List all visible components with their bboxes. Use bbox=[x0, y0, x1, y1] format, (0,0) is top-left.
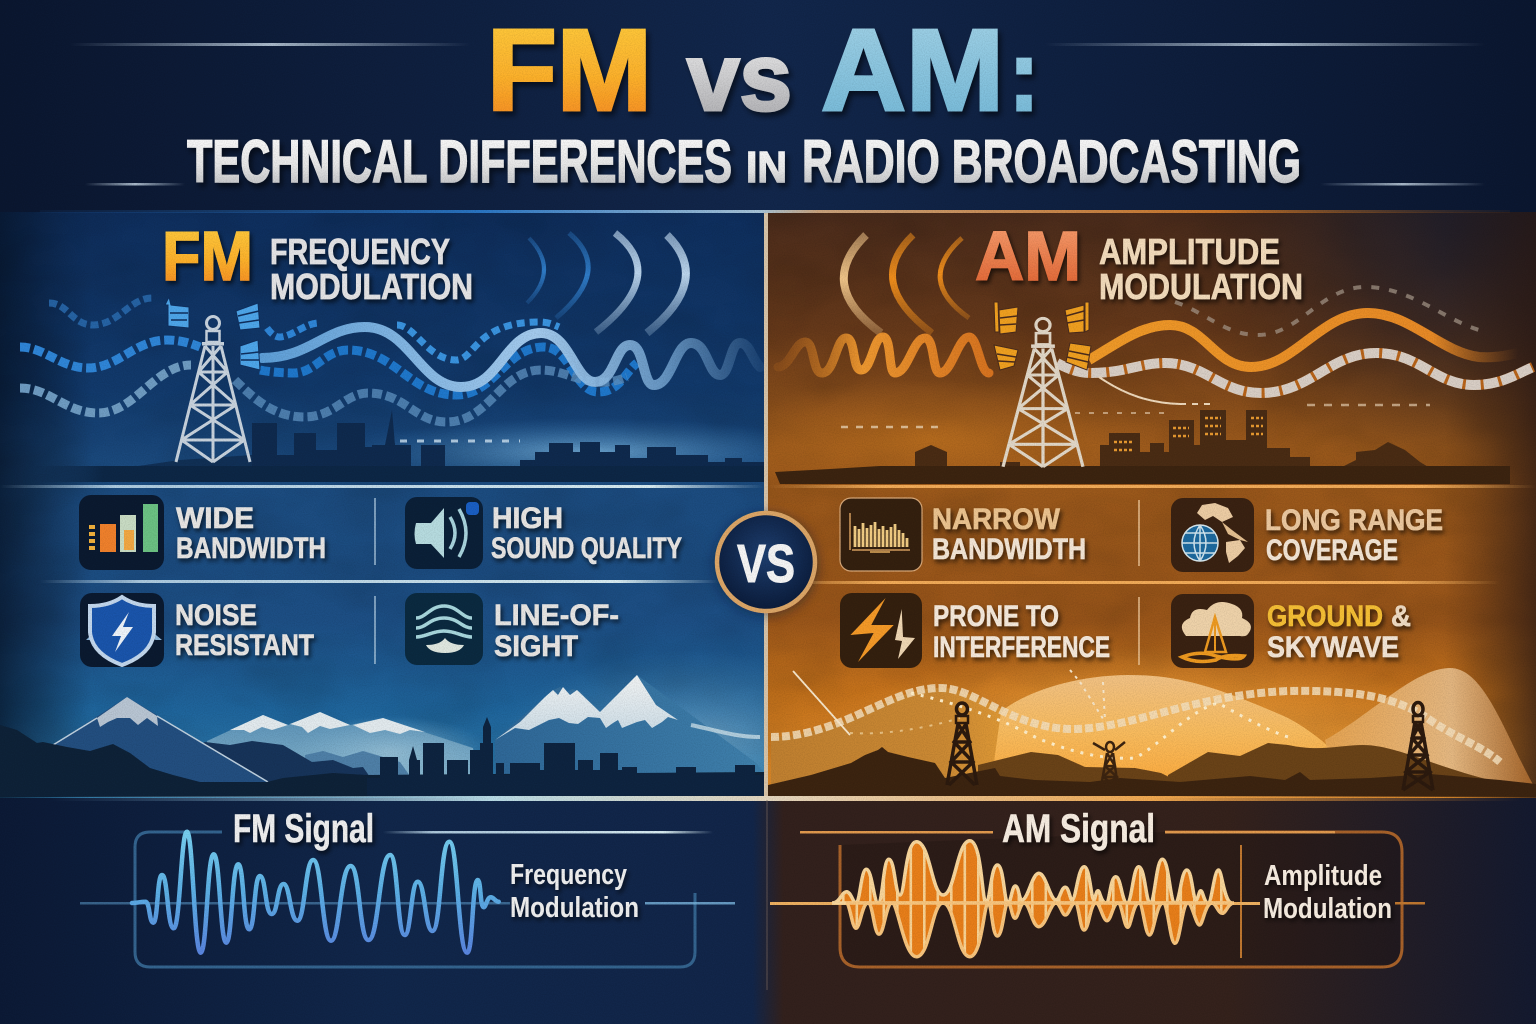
label: HIGH bbox=[492, 502, 563, 535]
mid dark hill bbox=[204, 741, 368, 782]
title bbox=[487, 5, 1039, 135]
label: SIGHT bbox=[494, 630, 578, 663]
AM signal caption bbox=[1263, 860, 1392, 925]
title: FM bbox=[487, 5, 652, 135]
label bbox=[1265, 504, 1443, 567]
pale mid mountains bbox=[207, 712, 474, 775]
label: NARROW bbox=[932, 503, 1061, 536]
AM radio arcs bbox=[844, 235, 969, 333]
label: WIDE bbox=[176, 502, 254, 535]
FM heading: MODULATION bbox=[270, 266, 473, 307]
AM thin curve and dotted lines bbox=[841, 377, 1430, 427]
label: SOUND QUALITY bbox=[491, 532, 682, 565]
panel: AM bbox=[768, 212, 1536, 798]
AM heading: MODULATION bbox=[1099, 266, 1303, 307]
label bbox=[175, 599, 314, 662]
feature: high sound quality bbox=[405, 497, 682, 569]
FM heading bbox=[162, 217, 473, 307]
dark foreground silhouette bbox=[768, 747, 1536, 797]
panel: FM bbox=[0, 212, 764, 798]
FM radio arcs bbox=[527, 233, 686, 333]
VS badge: VS bbox=[737, 534, 795, 594]
AM thin gray dashed wave bbox=[1175, 287, 1479, 335]
label: SKYWAVE bbox=[1267, 631, 1399, 664]
FM waveform bbox=[132, 832, 499, 953]
subtitle: IN bbox=[746, 143, 787, 192]
FM heading: FM bbox=[162, 217, 253, 295]
dotted sky path bbox=[911, 693, 1288, 758]
center divider bbox=[764, 212, 768, 798]
AM antenna panels bbox=[994, 302, 1091, 370]
feature: narrow bandwidth bbox=[840, 498, 1086, 571]
icon: globe bbox=[1171, 498, 1254, 572]
title: AM bbox=[821, 5, 1004, 135]
AM waveform bbox=[832, 841, 1234, 957]
feature: wide bandwidth bbox=[79, 495, 326, 570]
FM signal caption: Modulation bbox=[510, 892, 639, 924]
tower small bbox=[1093, 742, 1125, 787]
signal frame bbox=[135, 832, 695, 967]
label: COVERAGE bbox=[1266, 534, 1398, 567]
feature: ground and skywave bbox=[1171, 594, 1411, 668]
FM solid modulated wave bbox=[262, 327, 760, 387]
subtitle: RADIO BROADCASTING bbox=[802, 128, 1301, 195]
icon: lightning bbox=[840, 593, 922, 668]
label bbox=[932, 503, 1086, 566]
label bbox=[176, 502, 326, 565]
AM heading: AM bbox=[975, 217, 1081, 295]
AM signal caption: Amplitude bbox=[1264, 860, 1382, 892]
label bbox=[491, 502, 682, 565]
label: LONG RANGE bbox=[1265, 504, 1443, 537]
top panel edge line bbox=[40, 210, 1510, 213]
panel: FM signal bbox=[80, 807, 735, 967]
label: PRONE TO bbox=[933, 600, 1059, 633]
label: INTERFERENCE bbox=[933, 631, 1110, 664]
label: NOISE bbox=[175, 599, 257, 632]
VS badge bbox=[715, 513, 817, 615]
icon: cloud and mast bbox=[1171, 594, 1254, 668]
axis line bbox=[80, 902, 735, 904]
FM signal caption: Frequency bbox=[510, 859, 627, 891]
tower left bbox=[947, 703, 977, 785]
FM skyline bbox=[30, 410, 764, 482]
title: vs bbox=[687, 24, 792, 131]
icon: narrow spectrum bbox=[840, 498, 922, 571]
tower right bbox=[1403, 702, 1433, 790]
title: : bbox=[1009, 20, 1039, 132]
dark foreground hills bbox=[0, 725, 764, 797]
AM solid modulated wave bbox=[1089, 313, 1518, 367]
gold hill under wave bbox=[771, 688, 1000, 784]
axis line bbox=[770, 902, 1425, 905]
AM heading: AMPLITUDE bbox=[1099, 231, 1280, 272]
signal frame bbox=[840, 832, 1402, 967]
right mountains bbox=[495, 675, 760, 774]
light hills bbox=[994, 668, 1532, 784]
FM antenna panels bbox=[165, 297, 260, 370]
FM heading: FREQUENCY bbox=[270, 231, 450, 272]
AM skyline bbox=[775, 410, 1510, 484]
AM feature divider lines bbox=[768, 485, 1536, 665]
FM landscape with mountains and city bbox=[0, 675, 764, 797]
icon: waves bbox=[405, 593, 483, 665]
AM squiggle input wave bbox=[778, 337, 989, 373]
AM signal heading: AM Signal bbox=[1002, 807, 1155, 851]
panel: AM signal bbox=[770, 807, 1425, 967]
FM feature divider lines bbox=[0, 485, 764, 664]
feature: line-of-sight bbox=[405, 593, 619, 665]
label bbox=[494, 599, 619, 663]
label: BANDWIDTH bbox=[932, 533, 1086, 566]
FM signal heading: FM Signal bbox=[233, 807, 374, 851]
dashed signal wave bbox=[771, 688, 1500, 762]
AM dashed white wave bbox=[1057, 353, 1533, 393]
AM tower bbox=[1003, 318, 1083, 467]
label: BANDWIDTH bbox=[176, 532, 326, 565]
dark hills bbox=[978, 743, 1486, 782]
label: & bbox=[1391, 600, 1411, 633]
feature: noise resistant bbox=[80, 593, 314, 667]
FM tower bbox=[176, 316, 250, 462]
AM heading bbox=[975, 217, 1303, 307]
icon: shield bbox=[80, 593, 164, 667]
label: GROUND bbox=[1267, 600, 1383, 633]
icon: bars bbox=[79, 495, 164, 570]
label bbox=[1267, 600, 1411, 664]
left mountain bbox=[53, 697, 268, 782]
city silhouette bbox=[380, 717, 755, 775]
label bbox=[933, 600, 1110, 664]
FM signal caption bbox=[510, 859, 639, 924]
bottom panel edge line bbox=[50, 796, 1520, 801]
subtitle: TECHNICAL DIFFERENCES bbox=[187, 128, 732, 195]
label: RESISTANT bbox=[175, 629, 314, 662]
feature: long range coverage bbox=[1171, 498, 1443, 572]
icon: speaker bbox=[405, 497, 483, 569]
AM signal caption: Modulation bbox=[1263, 893, 1392, 925]
feature: prone to interference bbox=[840, 593, 1110, 668]
AM landscape with hills and towers bbox=[768, 668, 1536, 797]
FM dashed carrier waves bbox=[20, 298, 637, 422]
label: LINE-OF- bbox=[494, 599, 619, 632]
